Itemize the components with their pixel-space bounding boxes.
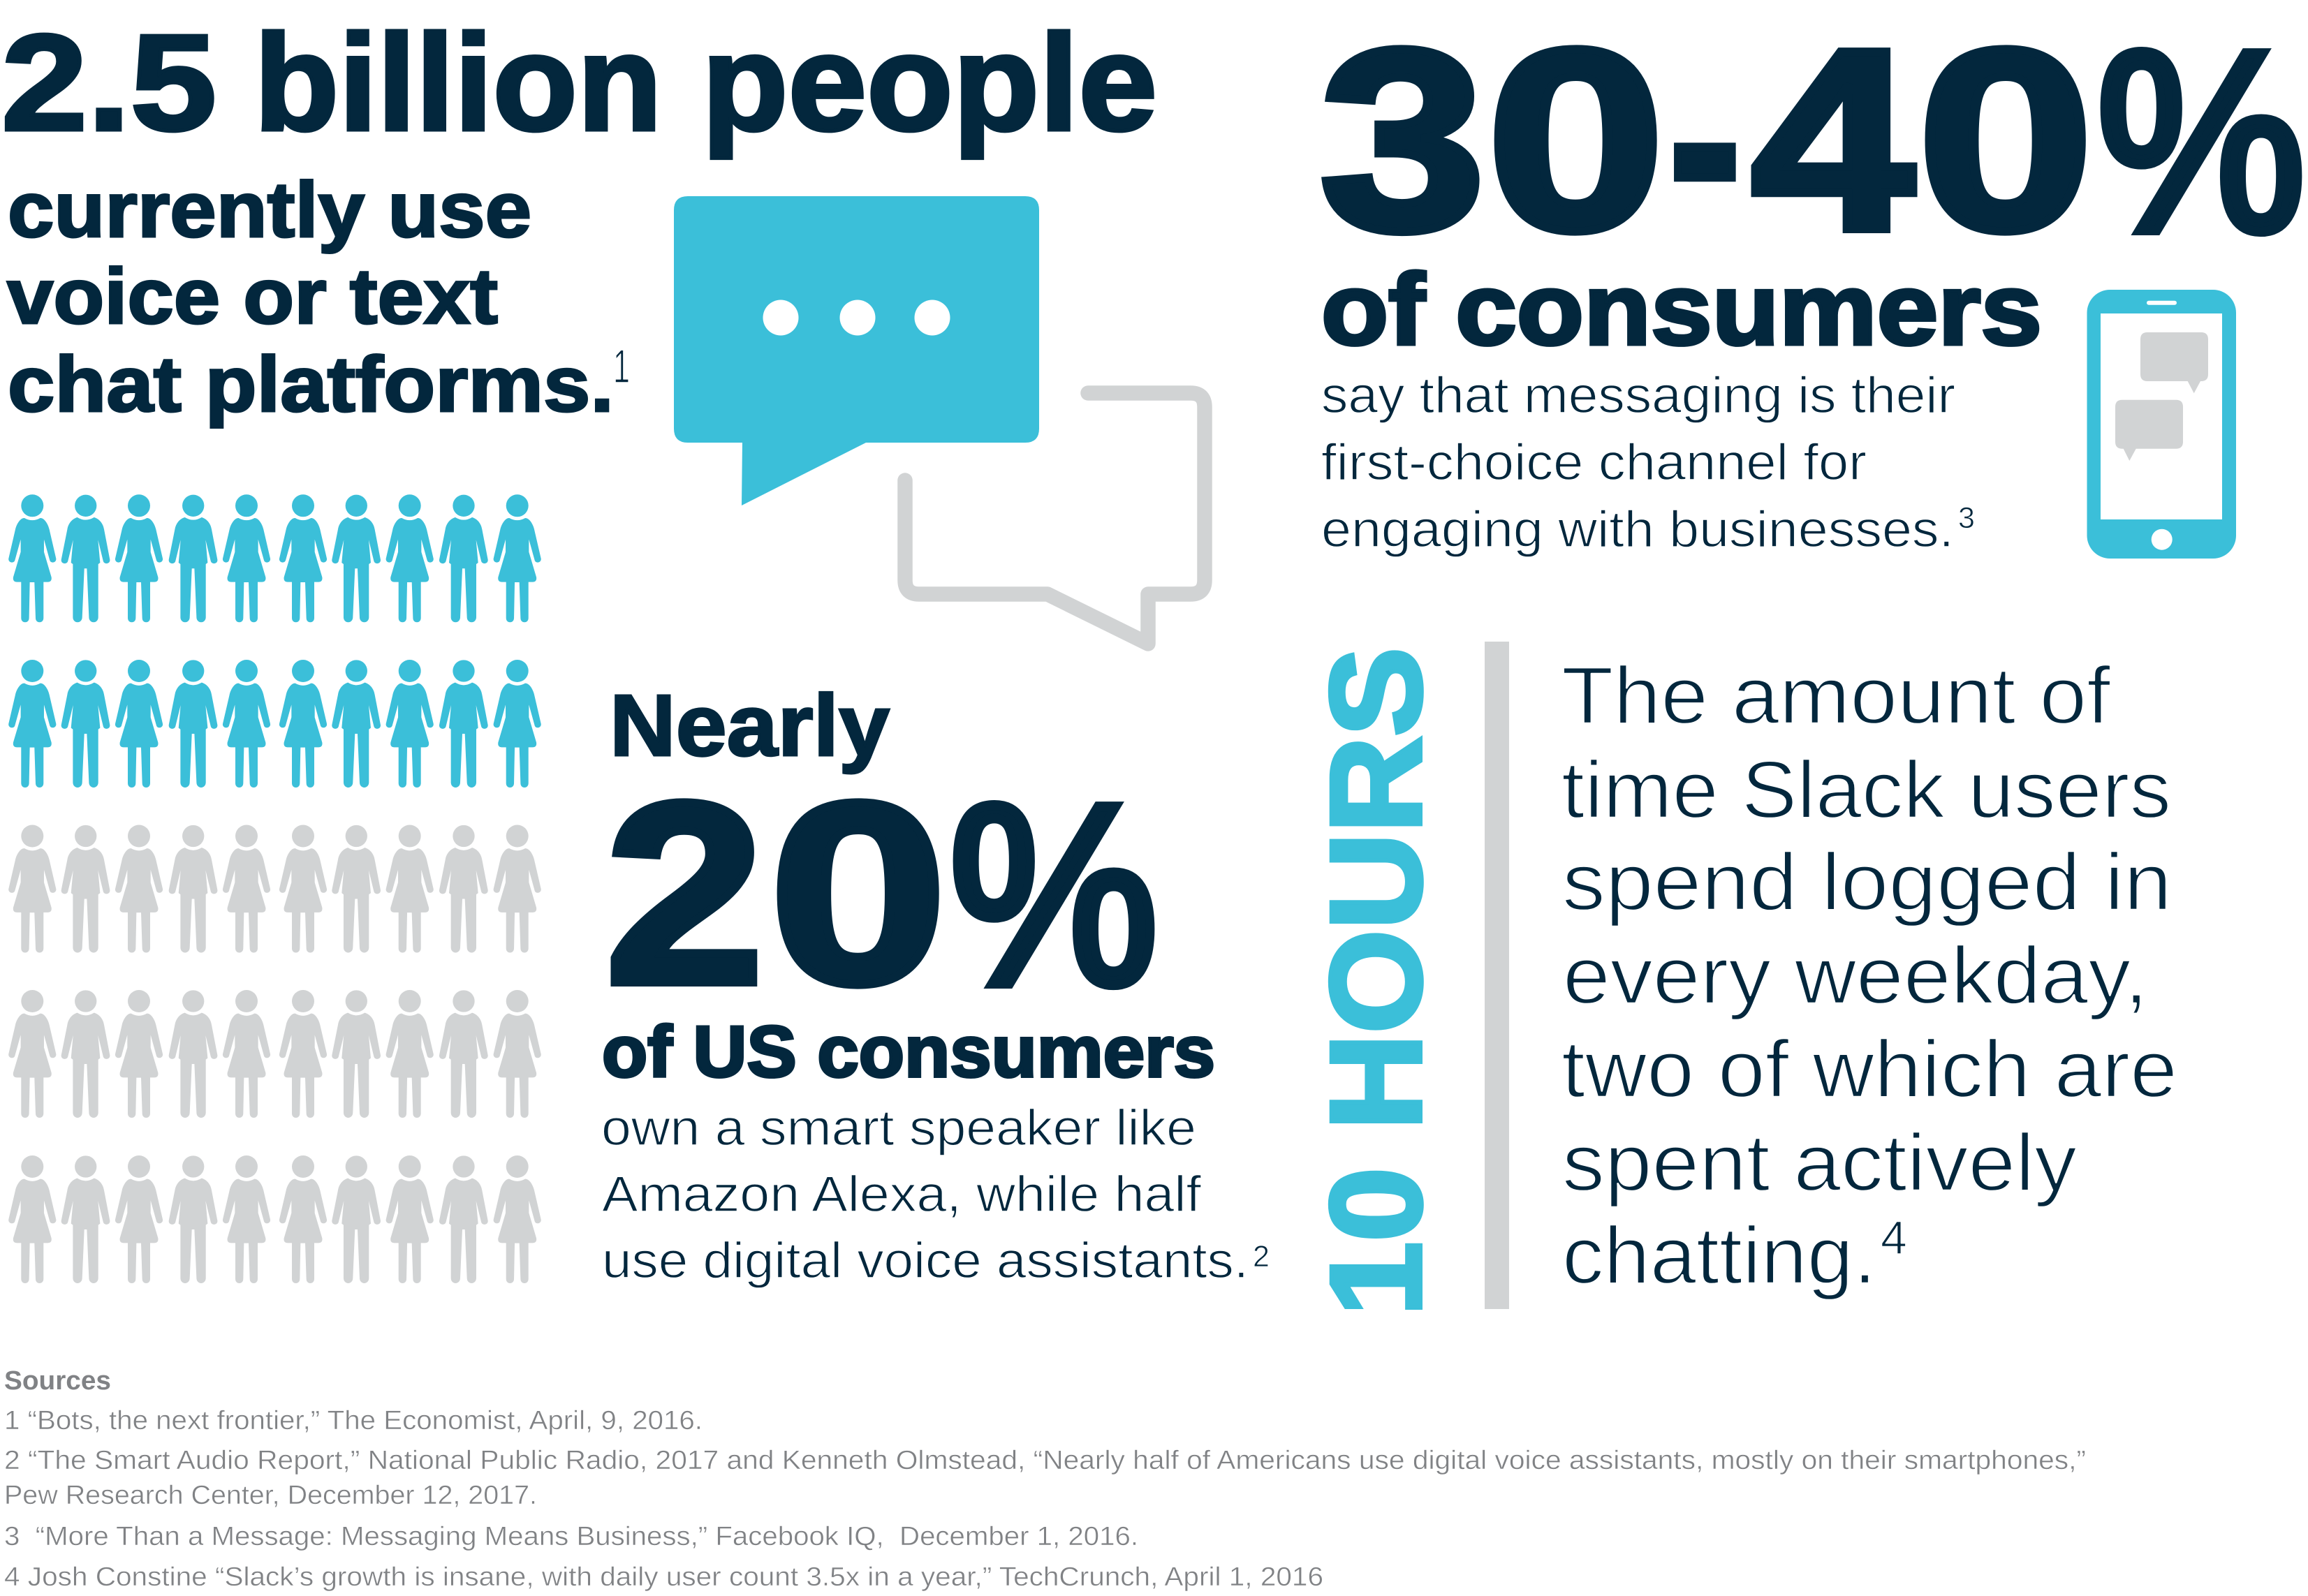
subheading: currently use voice or text chat platforms: 1 <box>613 340 630 393</box>
source list: 4 Josh Constine “Slack’s growth is insane, with daily user count 3.5x in a year,” TechCrunch, April 1, 2016 <box>4 1562 1323 1592</box>
text: messaging first-choice channel <box>1321 367 1975 558</box>
text: messaging first-choice channel: first-choice channel for <box>1321 434 1867 491</box>
text: Slack users time logged in: two of which are <box>1561 1024 2177 1114</box>
text: smart speaker usage: use digital voice assistants. <box>602 1233 1249 1289</box>
big stat: 30-40%: 4 <box>1751 0 1916 284</box>
icon: blue speech bubble with dots <box>674 196 1039 505</box>
big stat: 30-40%: 3 <box>1320 0 1485 284</box>
text: smart speaker usage: own a smart speaker like <box>601 1100 1196 1156</box>
row 1 of people (blue) <box>8 494 541 622</box>
headline: 2.5 billion people: 2.5 <box>1 6 216 159</box>
subheading: of US consumers: of US consumers <box>602 1012 1215 1093</box>
text: smart speaker usage: Amazon Alexa, while half <box>602 1167 1202 1222</box>
headline: 2.5 billion people: people <box>702 6 1157 159</box>
headline: 2.5 billion people: billion <box>254 6 662 159</box>
headline: 2.5 billion people <box>1 6 1157 159</box>
source list: 3 “More Than a Message: Messaging Means Business,” Facebook IQ, December 1, 2016. <box>4 1522 1138 1551</box>
big stat: 20%: 0 <box>770 750 947 1037</box>
subheading: currently use voice or text chat platforms: currently use <box>8 166 531 253</box>
sources footnotes <box>4 1366 2086 1592</box>
source list: 1 “Bots, the next frontier,” The Economist, April, 9, 2016. <box>4 1406 703 1435</box>
big stat: 30-40%: 0 <box>1487 0 1665 284</box>
text: Slack users time logged in <box>1561 650 2177 1301</box>
row 3 of people (grey) <box>8 825 541 952</box>
vertical divider bar <box>1485 642 1509 1309</box>
big stat: 30-40%: 0 <box>1918 0 2094 284</box>
text: Slack users time logged in: spent actively <box>1562 1117 2077 1208</box>
subheading: of consumers: of consumers <box>1321 253 2042 366</box>
big stat: 20%: % <box>949 751 1159 1039</box>
icon: smartphone with chat bubbles <box>2087 290 2236 559</box>
source list: 2 “The Smart Audio Report,” National Public Radio, 2017 and Kenneth Olmstead, “Nearly half of Americans use digital voice assistants, mostly on their smartphones,” <box>4 1446 2086 1475</box>
big stat: 20% <box>605 750 1159 1039</box>
row 4 of people (grey) <box>8 990 541 1118</box>
row 2 of people (blue) <box>8 660 541 788</box>
text: Slack users time logged in: chatting. <box>1562 1210 1876 1301</box>
big stat: 20%: 2 <box>605 750 764 1037</box>
sources heading: Sources <box>4 1366 111 1396</box>
heading: Nearly: Nearly <box>610 677 890 774</box>
text: Slack users time logged in: time Slack users <box>1561 744 2171 835</box>
pictogram: 2 in 5 people highlighted <box>8 494 541 1283</box>
text: Slack users time logged in: 4 <box>1881 1211 1907 1264</box>
big stat: 30-40% <box>1320 0 2306 286</box>
source list: Pew Research Center, December 12, 2017. <box>4 1481 537 1510</box>
rotated stat: 10 HOURS: 10 HOURS <box>1304 647 1448 1316</box>
subheading: currently use voice or text chat platforms: voice or text <box>7 253 498 340</box>
subheading: currently use voice or text chat platforms <box>7 166 630 428</box>
text: Slack users time logged in: every weekday, <box>1563 930 2148 1021</box>
source list <box>4 1406 2086 1592</box>
big stat: 30-40%: - <box>1669 0 1741 284</box>
subheading: currently use voice or text chat platforms: chat platforms. <box>8 341 614 428</box>
text: messaging first-choice channel: say that messaging is their <box>1321 367 1955 424</box>
row 5 of people (grey) <box>8 1155 541 1283</box>
icon: grey outline speech bubble <box>905 393 1205 644</box>
text: messaging first-choice channel: 3 <box>1958 501 1975 535</box>
text: messaging first-choice channel: engaging with businesses. <box>1321 501 1954 558</box>
text: smart speaker usage: 2 <box>1253 1240 1270 1273</box>
text: smart speaker usage <box>601 1100 1270 1289</box>
text: Slack users time logged in: The amount of <box>1561 650 2111 741</box>
text: Slack users time logged in: spend logged in <box>1562 836 2172 927</box>
